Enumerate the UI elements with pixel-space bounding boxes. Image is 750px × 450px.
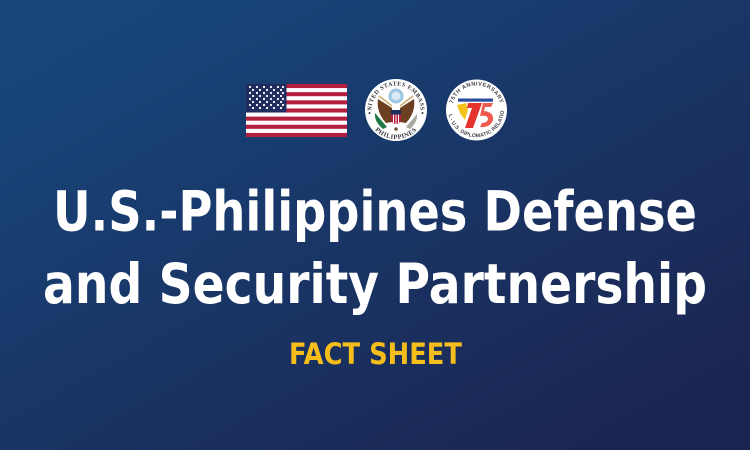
title	[43, 180, 707, 316]
icon: 75th anniversary seal: 75TH ANNIVERSARY	[449, 82, 504, 103]
icon: 75th anniversary seal	[446, 80, 507, 140]
icon: US flag	[246, 84, 347, 137]
icon: US Embassy seal	[365, 79, 427, 141]
icon: US Embassy seal: PHILIPPINES	[375, 126, 416, 139]
subtitle: FACT SHEET	[289, 337, 462, 371]
